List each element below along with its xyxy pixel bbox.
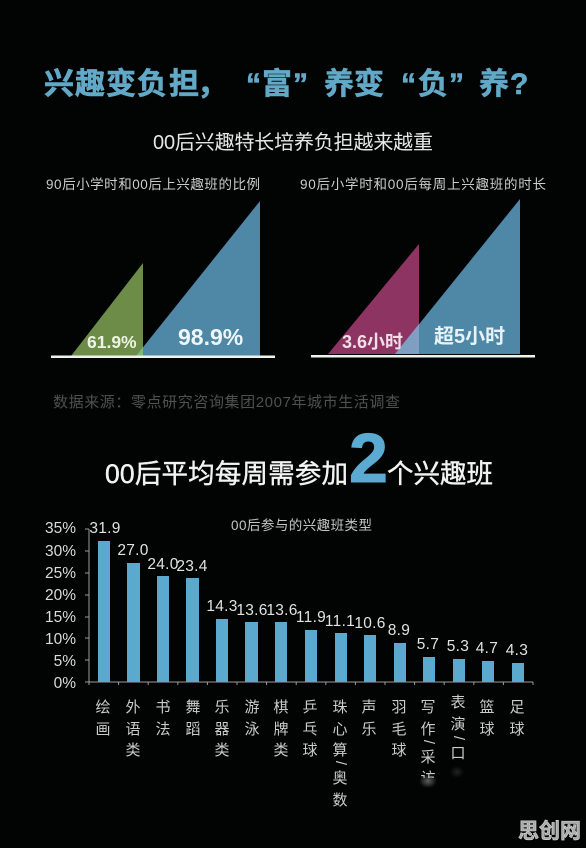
category labels: 乐 [214, 699, 230, 716]
triangle overlap [136, 347, 143, 356]
y axis labels: 5% [54, 653, 76, 670]
bar values: 8.9 [388, 622, 410, 639]
y axis labels: 20% [45, 587, 76, 604]
subtitle: 00后兴趣特长培养负担越来越重 [153, 131, 433, 154]
value: over 5 hours: 超5小时 [434, 325, 505, 348]
category labels: 奥 [332, 770, 348, 787]
data source: 数据来源：零点研究咨询集团2007年城市生活调查 [53, 394, 400, 411]
bar chart: class types [45, 517, 533, 809]
category labels: 书 [155, 699, 171, 716]
category labels: 演 [450, 716, 466, 733]
category labels: 口 [450, 745, 466, 762]
category labels: 声 [361, 698, 377, 716]
category labels: 画 [95, 721, 111, 738]
category labels: 绘 [95, 699, 111, 716]
category labels: 乐 [361, 721, 377, 738]
bar values: 11.1 [325, 613, 355, 630]
triangle overlap [395, 324, 419, 354]
panel heading: hours: 90后小学时和00后每周上兴趣班的时长 [300, 177, 546, 192]
triangle: 90s generation share [71, 263, 143, 356]
axes [85, 529, 533, 685]
category labels: 数 [332, 792, 348, 809]
value: 61.9%: 61.9% [87, 332, 137, 352]
category labels: 表 [450, 694, 466, 711]
bar values: 14.3 [206, 598, 238, 615]
triangle: 90s generation hours [328, 244, 419, 354]
category labels: 类 [125, 742, 141, 759]
bar values: 5.7 [417, 636, 439, 653]
baseline [311, 355, 535, 358]
category labels: 心 [332, 721, 348, 738]
bar values: 10.6 [354, 615, 386, 632]
chart title: 00后参与的兴趣班类型 [231, 517, 372, 533]
baseline [51, 356, 275, 358]
bar values: 31.9 [89, 520, 121, 537]
category labels: 牌 [273, 721, 289, 738]
category labels: 球 [302, 742, 318, 759]
y axis labels: 15% [45, 609, 76, 626]
bar values [89, 520, 528, 659]
category labels: 篮 [479, 698, 495, 716]
category labels: 羽 [391, 699, 407, 716]
heading: two classes per week [105, 419, 493, 497]
y axis labels: 10% [45, 631, 76, 648]
value: 98.9%: 98.9% [178, 324, 243, 350]
watermark: 思创网 [518, 820, 581, 843]
bar values: 4.7 [476, 640, 498, 657]
category labels: 算 [332, 741, 348, 759]
y axis labels: 30% [45, 543, 76, 560]
category labels: 球 [509, 721, 525, 738]
bar values: 13.6 [236, 602, 268, 619]
category labels: / [420, 740, 437, 745]
bar values: 27.0 [117, 542, 149, 559]
category labels: 访 [420, 770, 436, 787]
category labels: 外 [125, 699, 141, 716]
category labels: 写 [420, 699, 436, 716]
category labels: 蹈 [185, 721, 201, 738]
category labels: 类 [214, 742, 230, 759]
category labels: 类 [273, 742, 289, 759]
category labels: 珠 [332, 699, 348, 716]
category labels: / [450, 736, 467, 741]
bar values: 11.9 [296, 609, 326, 626]
category labels: 泳 [244, 721, 260, 738]
category labels: 语 [125, 721, 141, 738]
panel: weekly hours in interest classes [300, 177, 546, 358]
category labels: 足 [509, 699, 525, 716]
panel: share attending interest classes [46, 177, 275, 358]
heading text left: 00后平均每周需参加 [105, 459, 348, 489]
category labels: 毛 [391, 721, 407, 738]
category labels: 法 [155, 721, 171, 738]
y axis labels [45, 520, 76, 692]
category labels: 游 [244, 699, 260, 716]
bar values: 23.4 [176, 558, 208, 575]
category labels: 棋 [273, 699, 289, 716]
category labels: 舞 [185, 699, 201, 716]
category labels: 乒 [302, 699, 318, 716]
category labels: / [332, 761, 349, 766]
category labels: 乓 [302, 721, 318, 738]
category labels: 作 [420, 721, 436, 738]
y axis labels: 0% [54, 675, 76, 692]
bar values: 4.3 [506, 642, 528, 659]
value: 3.6 hours: 3.6小时 [342, 332, 403, 352]
category labels [95, 694, 525, 809]
triangle: 00s generation share [136, 201, 260, 356]
category labels: 球 [391, 742, 407, 759]
category labels: 器 [214, 721, 230, 738]
category labels: 球 [479, 721, 495, 738]
smudge over clipped labels [419, 766, 464, 788]
title: 兴趣变负担，“富”养变“负”养? [44, 68, 528, 101]
bar values: 24.0 [147, 556, 179, 573]
category labels: 采 [420, 749, 436, 766]
bars [98, 541, 524, 682]
bar values: 5.3 [447, 638, 469, 655]
y axis labels: 25% [45, 565, 76, 582]
panel heading: share: 90后小学时和00后上兴趣班的比例 [46, 177, 260, 192]
heading text right: 个兴趣班 [387, 459, 493, 489]
triangle: 00s generation hours [395, 199, 520, 354]
bar values: 13.6 [266, 602, 298, 619]
big number 2: 2 [349, 419, 388, 497]
y axis labels: 35% [45, 520, 76, 537]
